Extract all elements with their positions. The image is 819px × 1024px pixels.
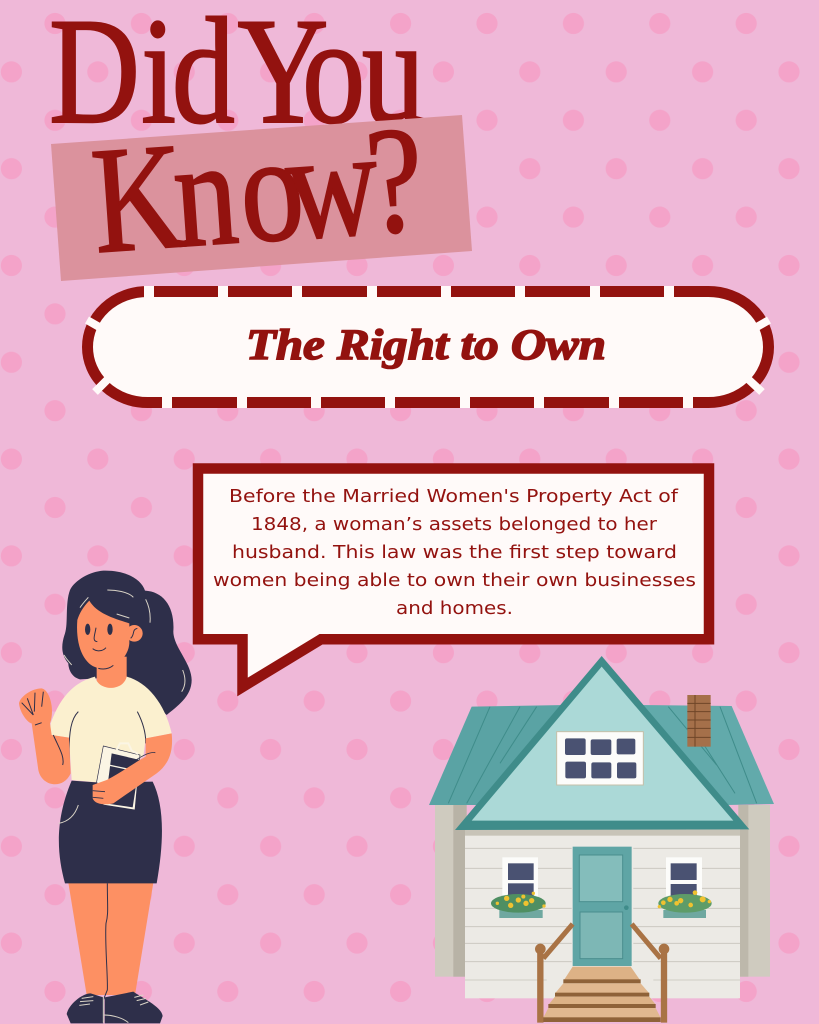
left window with flower box [491, 857, 546, 918]
hair [62, 571, 192, 715]
text block: property act fact: 1848, a woman’s assets belonged to her [251, 514, 658, 535]
title: Know? text: Know? [87, 96, 429, 286]
panel: dashed heading pill [87, 286, 769, 408]
side roofs [429, 705, 567, 805]
illustration: watercolor house [429, 656, 774, 1023]
shoes [67, 992, 163, 1023]
text block: property act fact: women being able to own their own businesses [213, 570, 696, 591]
front wall [465, 828, 740, 998]
stairs [543, 967, 661, 1022]
text block: property act fact [213, 486, 696, 619]
illustration: woman with clipboard [19, 571, 192, 1023]
main gable [455, 656, 749, 830]
door [573, 847, 632, 966]
lower arm and hand [93, 733, 172, 804]
text block: property act fact: Before the Married Women's Property Act of [229, 486, 679, 507]
title tag: Know? [51, 96, 472, 286]
text block: property act fact: husband. This law was the first step toward [232, 542, 677, 563]
panel: speech bubble [198, 468, 709, 687]
skirt [59, 781, 162, 883]
shirt [50, 677, 172, 783]
clipboard [97, 743, 140, 810]
chimney [687, 695, 711, 747]
text block: property act fact: and homes. [396, 598, 513, 619]
heading: The Right to Own: The Right to Own [246, 322, 606, 369]
tag background [51, 115, 472, 281]
gable window [557, 732, 643, 785]
neck and face [97, 657, 127, 693]
raised arm [19, 688, 71, 784]
right window with flower box [658, 857, 712, 918]
side walls [435, 805, 467, 977]
railings [540, 924, 664, 1023]
legs [68, 883, 153, 995]
